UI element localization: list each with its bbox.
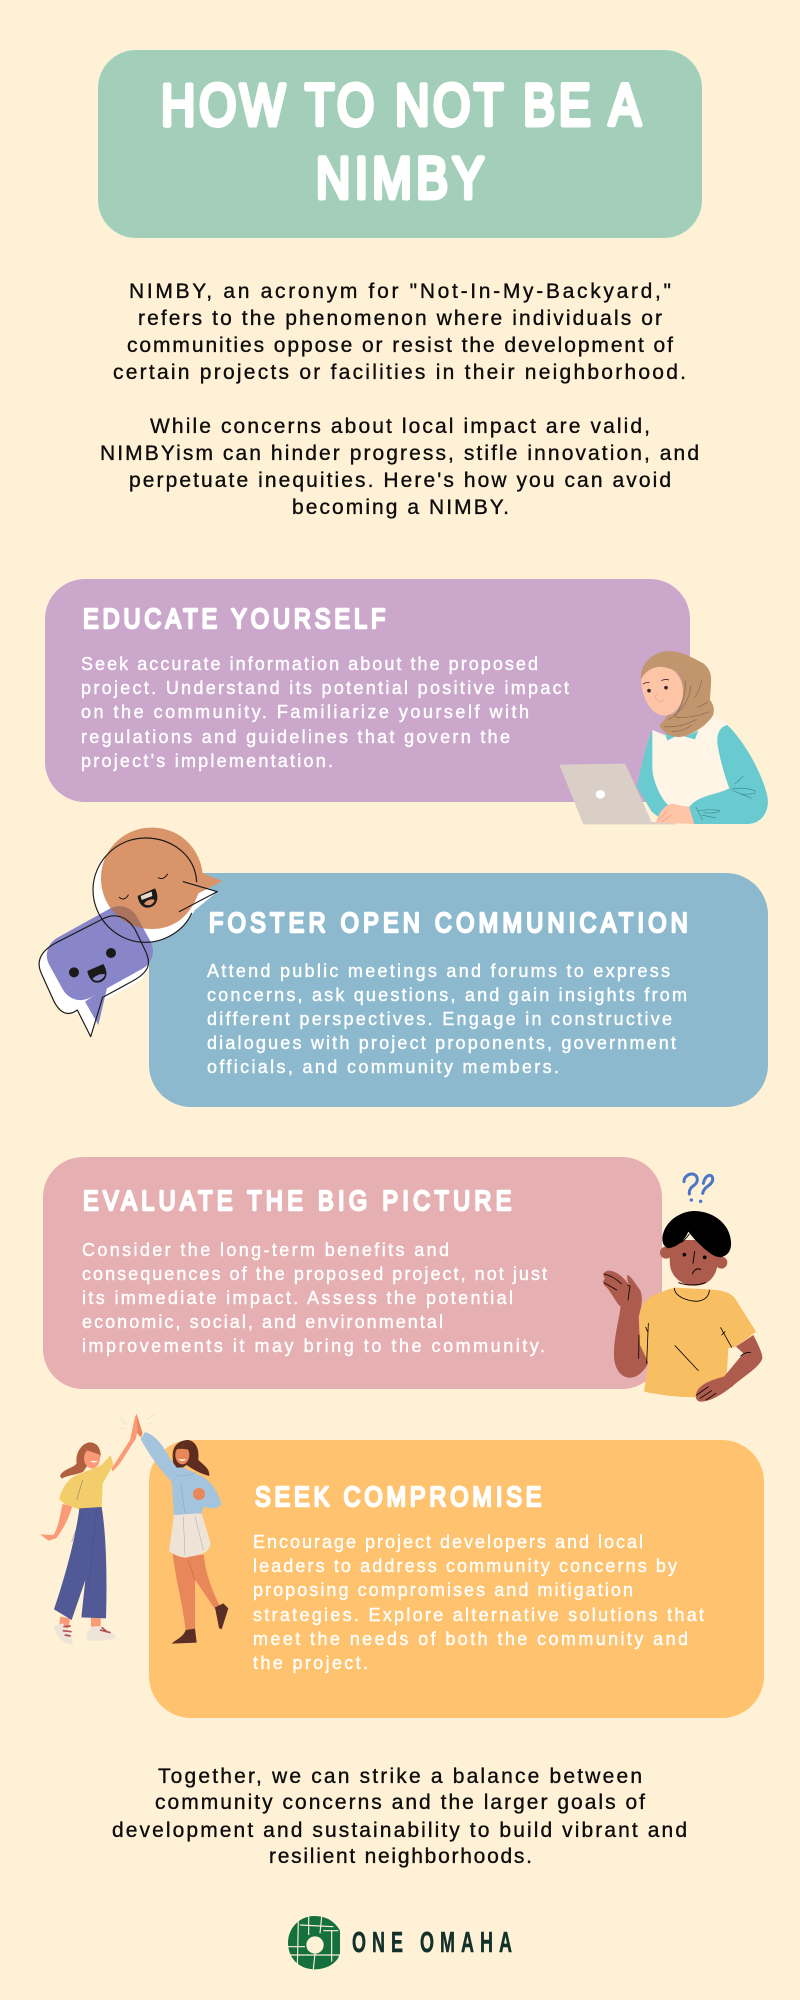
heading: foster open communication: FOSTER OPEN COMMUNICATION [209, 908, 688, 938]
closing text: resilient neighborhoods. [269, 1845, 532, 1868]
body: educate yourself: on the community. Familiarize yourself with [81, 702, 529, 722]
body: educate yourself [81, 654, 569, 771]
body: seek compromise: strategies. Explore alternative solutions that [253, 1605, 704, 1625]
shirt [639, 1288, 756, 1397]
body: educate yourself: project. Understand its potential positive impact [81, 678, 569, 698]
logo wordmark: ONE OMAHA [352, 1927, 512, 1959]
blue bubble [40, 899, 160, 1025]
intro text: NIMBY, an acronym for "Not-In-My-Backyard," [129, 280, 671, 303]
body: foster open communication: officials, and community members. [207, 1057, 559, 1077]
heading: seek compromise: SEEK COMPROMISE [255, 1482, 541, 1512]
body: foster open communication [207, 961, 687, 1077]
blue bubble face [69, 948, 116, 983]
panel: seek compromise [149, 1440, 764, 1718]
intro text: communities oppose or resist the development of [127, 334, 673, 357]
panel: educate yourself [45, 579, 690, 802]
question marks [684, 1174, 713, 1203]
left woman [40, 1413, 137, 1644]
intro text [100, 280, 699, 519]
body: foster open communication: dialogues with project proponents, government [207, 1033, 676, 1053]
body: evaluate the big picture: improvements it may bring to the community. [82, 1336, 545, 1356]
illustration: speech bubbles [32, 828, 223, 1037]
intro text: NIMBYism can hinder progress, stifle innovation, and [100, 442, 699, 465]
other arm [696, 1335, 762, 1402]
clap sparks [118, 1414, 155, 1428]
closing text [112, 1765, 687, 1868]
closing text: Together, we can strike a balance between [158, 1765, 642, 1788]
right woman [137, 1414, 228, 1644]
body: educate yourself: project's implementation. [81, 751, 333, 771]
logo mark [288, 1916, 340, 1969]
body: seek compromise: Encourage project developers and local [253, 1532, 643, 1552]
body: foster open communication: different perspectives. Engage in constructive [207, 1009, 672, 1029]
body: evaluate the big picture [82, 1240, 547, 1356]
illustration: two women high-fiving [40, 1413, 228, 1644]
title [161, 74, 641, 211]
illustration: woman with laptop [559, 651, 768, 824]
title: NIMBY [316, 147, 484, 211]
body: evaluate the big picture: consequences of the proposed project, not just [82, 1264, 547, 1284]
intro text: refers to the phenomenon where individuals or [138, 307, 662, 330]
closing text: development and sustainability to build vibrant and [112, 1819, 687, 1842]
shirt and hand lines [604, 1274, 751, 1400]
orange bubble face [119, 874, 168, 908]
heading: evaluate the big picture: EVALUATE THE BIG PICTURE [83, 1186, 511, 1216]
body: seek compromise [253, 1532, 704, 1673]
body: foster open communication: Attend public meetings and forums to express [207, 961, 670, 981]
closing text: community concerns and the larger goals of [155, 1791, 645, 1814]
body: seek compromise: the project. [253, 1653, 368, 1673]
body: seek compromise: leaders to address community concerns by [253, 1556, 677, 1576]
logo: One Omaha [288, 1916, 512, 1969]
title panel [98, 50, 702, 238]
panel: evaluate the big picture [43, 1157, 662, 1389]
body: foster open communication: concerns, ask questions, and gain insights from [207, 985, 687, 1005]
body: evaluate the big picture: its immediate impact. Assess the potential [82, 1288, 513, 1308]
head [660, 1211, 731, 1286]
intro text: becoming a NIMBY. [292, 496, 509, 519]
body: educate yourself: Seek accurate information about the proposed [81, 654, 538, 674]
body: educate yourself: regulations and guidelines that govern the [81, 727, 510, 747]
body: evaluate the big picture: economic, social, and environmental [82, 1312, 443, 1332]
body: seek compromise: proposing compromises and mitigation [253, 1580, 633, 1600]
raised arm [603, 1271, 648, 1378]
orange bubble [101, 828, 223, 929]
outlines [39, 838, 217, 1037]
intro text: While concerns about local impact are valid, [150, 415, 650, 438]
title: HOW TO NOT BE A [161, 74, 641, 138]
illustration: confused boy [603, 1174, 762, 1402]
intro text: certain projects or facilities in their neighborhood. [113, 361, 686, 384]
heading: educate yourself: EDUCATE YOURSELF [83, 604, 385, 634]
body: evaluate the big picture: Consider the long-term benefits and [82, 1240, 449, 1260]
intro text: perpetuate inequities. Here's how you can avoid [129, 469, 671, 492]
body: seek compromise: meet the needs of both the community and [253, 1629, 688, 1649]
panel: foster open communication [149, 873, 768, 1107]
laptop [559, 764, 675, 824]
